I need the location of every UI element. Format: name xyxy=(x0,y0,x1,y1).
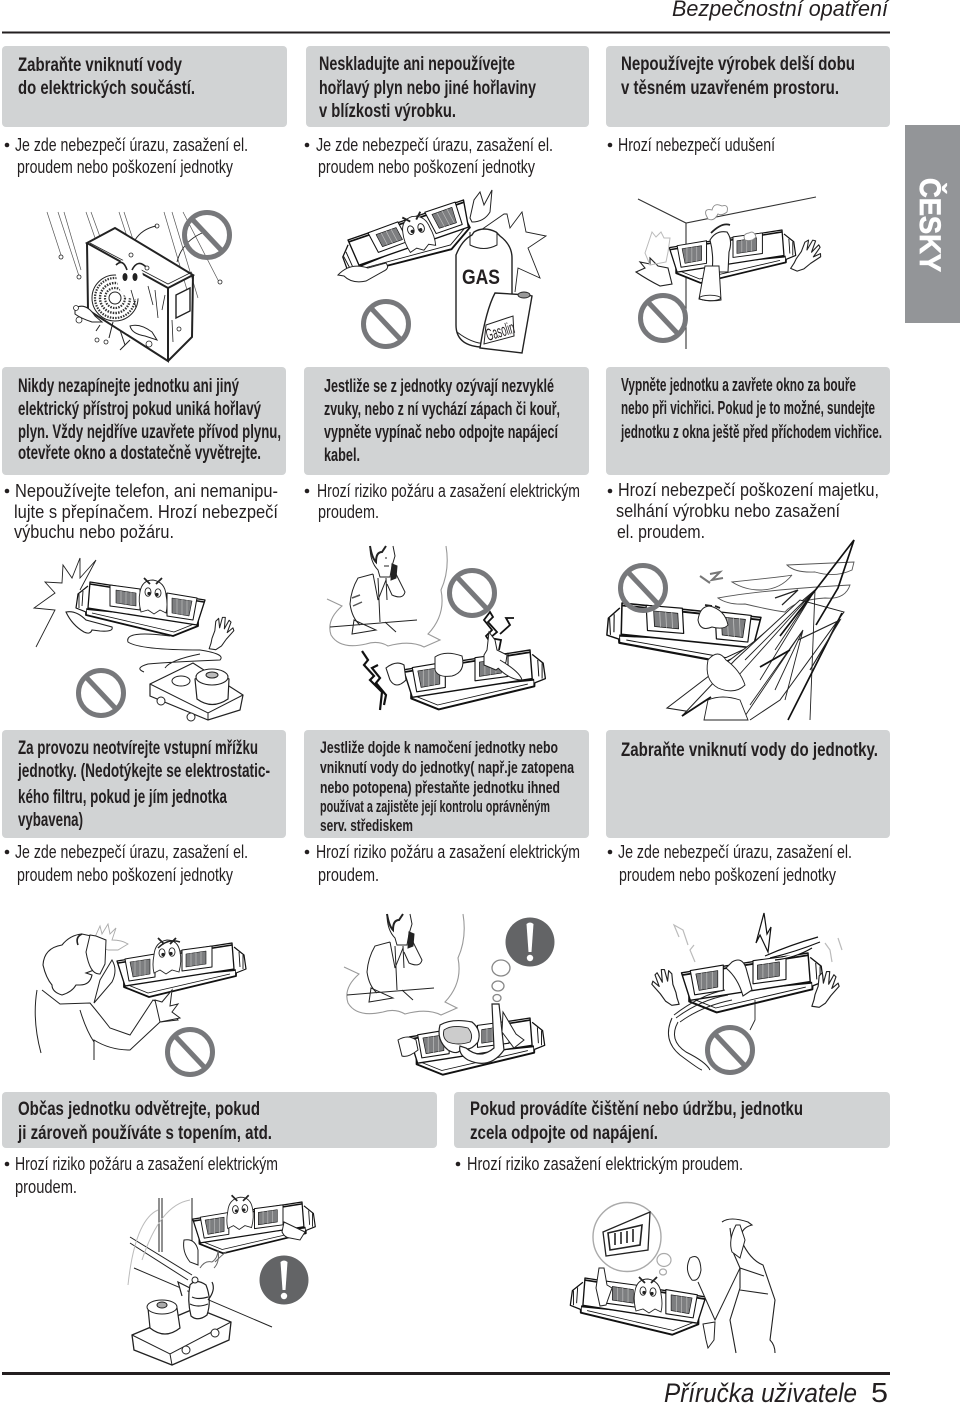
heading box: hořlavý plyn nebo jiné hořlaviny xyxy=(319,77,536,99)
heading box xyxy=(2,1092,437,1148)
heading box: zcela odpojte od napájení. xyxy=(470,1122,658,1144)
illustration: unit with spark, gas hose and stove xyxy=(34,558,243,721)
heading box: elektrický přístroj pokud uniká hořlavý xyxy=(18,398,261,420)
bullet text: el. proudem. xyxy=(617,522,705,542)
bullet text: lujte s přepínačem. Hrozí nebezpečí xyxy=(14,502,278,522)
bullet text: proudem. xyxy=(318,865,379,885)
icon: exclamation sign xyxy=(260,1256,308,1304)
panel: do not open inlet grille xyxy=(2,730,286,1074)
icon: prohibition sign xyxy=(184,212,230,258)
bullet text: proudem. xyxy=(15,1177,77,1197)
illustration: window, unit and stove with kettle xyxy=(128,1195,315,1365)
heading box: kabel. xyxy=(324,445,360,465)
heading box: kého filtru, pokud je jím jednotka xyxy=(18,786,227,808)
bullet text: Je zde nebezpečí úrazu, zasažení el. xyxy=(15,135,248,155)
panel: water damage xyxy=(304,730,589,1075)
bullet text xyxy=(5,481,278,542)
bullet text xyxy=(608,842,852,885)
panel: flammable gas storage xyxy=(305,46,589,353)
bullet text xyxy=(608,480,879,542)
heading box: Jestliže se z jednotky ozývají nezvyklé xyxy=(324,376,554,396)
bullet text: Je zde nebezpečí úrazu, zasažení el. xyxy=(15,842,248,862)
illustration: woman, switch bubble and unit xyxy=(570,1202,775,1353)
bullet text: Je zde nebezpečí úrazu, zasažení el. xyxy=(618,842,852,862)
icon: prohibition sign xyxy=(364,302,408,346)
bullet text xyxy=(305,842,580,885)
illustration: unit sprayed by hose with lightning xyxy=(652,913,842,1070)
heading box: vybavena) xyxy=(18,809,83,831)
heading box xyxy=(306,46,589,127)
label: Gasolin: Gasolin xyxy=(484,318,517,345)
illustration: man phoning, unit with snorkel xyxy=(344,914,545,1075)
heading box: zvuky, nebo z ní vychází zápach či kouř, xyxy=(324,399,560,419)
bullet text: Hrozí riziko požáru a zasažení elektrickým xyxy=(317,481,580,501)
panel: confined space xyxy=(606,46,890,349)
bullet text: výbuchu nebo požáru. xyxy=(14,522,174,542)
panel: water entering unit xyxy=(606,730,890,1072)
illustration: unit with gas bottle and gasoline can xyxy=(335,183,546,353)
bullet text: Nepoužívejte telefon, ani nemanipu- xyxy=(15,481,278,501)
language tab: ČESKY: ČESKY xyxy=(913,178,947,272)
heading box xyxy=(304,367,589,475)
icon: exclamation sign xyxy=(506,918,554,966)
bullet text: Hrozí riziko požáru a zasažení elektrickým xyxy=(15,1154,278,1174)
bullet text xyxy=(5,1154,278,1197)
heading box: Zabraňte vniknutí vody xyxy=(18,54,182,76)
heading box xyxy=(304,730,589,838)
panel: ventilate when heating xyxy=(2,1092,437,1365)
heading box: v blízkosti výrobku. xyxy=(319,100,456,122)
icon: prohibition sign xyxy=(450,570,494,616)
bullet text xyxy=(5,135,248,177)
panel: gas leak xyxy=(2,367,286,721)
heading box: Pokud provádíte čištění nebo údržbu, jednotku xyxy=(470,1098,803,1120)
heading box: Občas jednotku odvětrejte, pokud xyxy=(18,1098,260,1120)
illustration: unit hit by wind and lightning xyxy=(605,540,854,720)
label: GAS: GAS xyxy=(462,266,500,289)
language tab: ČESKY xyxy=(905,125,960,323)
panel: storm and wind xyxy=(605,367,890,720)
heading box: Za provozu neotvírejte vstupní mřížku xyxy=(18,737,258,759)
heading box: serv. střediskem xyxy=(320,817,413,835)
bullet text: Hrozí riziko zasažení elektrickým proudem. xyxy=(467,1154,743,1174)
heading box xyxy=(2,46,287,127)
heading box xyxy=(606,730,890,838)
icon: prohibition sign xyxy=(640,296,686,340)
bullet text: selhání výrobku nebo zasažení xyxy=(616,501,840,521)
bullet text xyxy=(305,135,553,177)
heading box: Zabraňte vniknutí vody do jednotky. xyxy=(621,739,878,761)
bullet text: Hrozí nebezpečí poškození majetku, xyxy=(618,480,879,500)
heading box: do elektrických součástí. xyxy=(18,77,195,99)
bullet text: proudem. xyxy=(318,502,379,522)
icon: prohibition sign xyxy=(620,566,666,610)
heading box: otevřete okno a dostatečně vyvětrejte. xyxy=(18,442,261,464)
heading box: vniknutí vody do jednotky( např.je zatopena xyxy=(320,759,575,777)
illustration: wet outdoor unit in rain xyxy=(47,212,222,361)
icon: prohibition sign xyxy=(168,1030,212,1074)
heading box: Nikdy nezapínejte jednotku ani jiný xyxy=(18,375,239,397)
bullet text: Hrozí riziko požáru a zasažení elektrickým xyxy=(316,842,580,862)
heading box: Jestliže dojde k namočení jednotky nebo xyxy=(320,739,558,757)
heading box: používat a zajistěte její kontrolu oprávněným xyxy=(320,798,550,816)
bullet text: proudem nebo poškození jednotky xyxy=(318,157,535,177)
bullet text: Hrozí nebezpečí udušení xyxy=(618,135,775,155)
heading box xyxy=(606,367,890,475)
heading box xyxy=(454,1092,890,1148)
bullet text: proudem nebo poškození jednotky xyxy=(17,157,233,177)
bullet text: proudem nebo poškození jednotky xyxy=(17,865,233,885)
heading box: plyn. Vždy nejdříve uzavřete přívod plynu, xyxy=(18,421,281,443)
heading box: Neskladujte ani nepoužívejte xyxy=(319,53,515,75)
heading box xyxy=(2,730,286,838)
heading box xyxy=(606,46,890,127)
heading box: ji zároveň používáte s topením, atd. xyxy=(17,1122,272,1144)
bullet text xyxy=(5,842,248,885)
panel: water into electrical parts xyxy=(2,46,287,361)
illustration: person touching unit xyxy=(35,924,246,1060)
heading box: nebo potopena) přestaňte jednotku ihned xyxy=(320,779,560,797)
bullet text xyxy=(305,481,580,522)
icon: prohibition sign xyxy=(78,670,124,716)
panel: disconnect before cleaning xyxy=(454,1092,890,1353)
bullet text: proudem nebo poškození jednotky xyxy=(619,865,836,885)
illustration: man phoning in bubble, shaking unit xyxy=(327,546,545,710)
heading box: v těsném uzavřeném prostoru. xyxy=(621,77,839,99)
illustration: unit in a room corner with glass xyxy=(636,197,824,349)
heading box: vypněte vypínač nebo odpojte napájecí xyxy=(324,422,559,442)
icon: prohibition sign xyxy=(708,1028,752,1072)
heading box xyxy=(2,367,286,475)
bullet text: Je zde nebezpečí úrazu, zasažení el. xyxy=(316,135,553,155)
heading box: Nepoužívejte výrobek delší dobu xyxy=(621,53,855,75)
heading box: jednotky. (Nedotýkejte se elektrostatic- xyxy=(17,760,270,782)
panel: strange noises xyxy=(304,367,589,710)
